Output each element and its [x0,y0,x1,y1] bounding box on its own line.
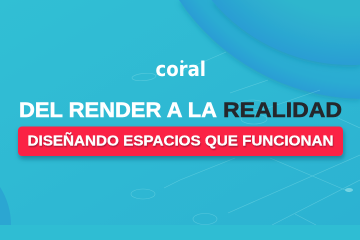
node [345,188,353,192]
logo: coral [156,57,206,81]
title [19,98,342,122]
blueprint line art [131,52,360,225]
subtitle: DISEÑANDO ESPACIOS QUE FUNCIONAN [28,132,334,150]
title: REALIDAD [223,98,342,122]
title: DEL RENDER A LA [19,98,217,122]
subtitle band [18,126,343,156]
